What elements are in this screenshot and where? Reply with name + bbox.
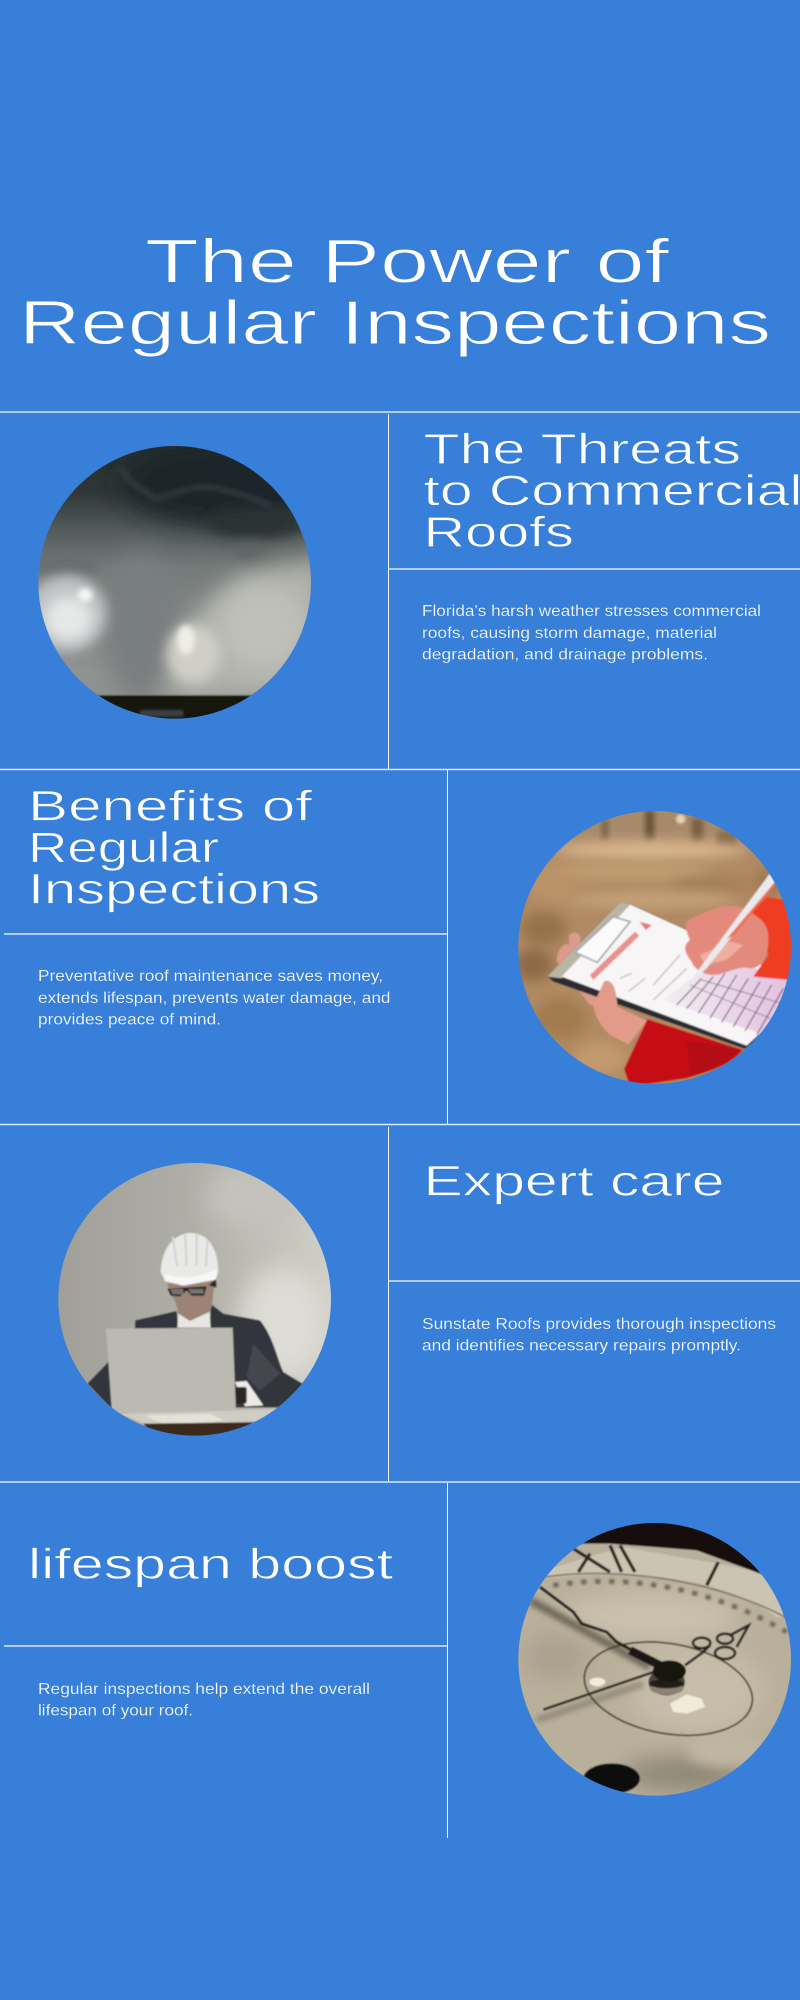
text block: lifespan boost: lifespan of your roof. xyxy=(38,1702,193,1720)
text block: benefits: provides peace of mind. xyxy=(38,1012,221,1028)
heading: expert care: Expert care xyxy=(424,1158,724,1206)
text block: expert care: and identifies necessary repairs promptly. xyxy=(422,1338,741,1354)
text block: lifespan boost xyxy=(38,1681,370,1720)
title: The Power of xyxy=(145,228,670,296)
text block: benefits: extends lifespan, prevents water damage, and xyxy=(38,990,390,1007)
heading: lifespan boost: lifespan boost xyxy=(28,1542,393,1588)
text block: lifespan boost: Regular inspections help extend the overall xyxy=(38,1681,370,1698)
panel: lifespan photo of clock xyxy=(518,1523,791,1796)
title: Regular Inspections xyxy=(19,289,771,358)
heading: the threats: Roofs xyxy=(424,510,574,556)
text block: the threats xyxy=(422,603,761,664)
heading: benefits: Benefits of xyxy=(28,784,312,830)
heading: benefits xyxy=(28,784,320,914)
text block: the threats: degradation, and drainage problems. xyxy=(422,646,708,664)
panel: benefits photo of clipboard xyxy=(518,811,791,1084)
panel: expert care photo of engineer xyxy=(58,1163,331,1436)
heading: the threats xyxy=(424,426,800,556)
text block: benefits xyxy=(38,968,390,1028)
heading: the threats: to Commercial xyxy=(424,468,800,515)
title xyxy=(19,228,771,358)
text block: the threats: Florida's harsh weather stresses commercial xyxy=(422,603,761,620)
text block: benefits: Preventative roof maintenance saves money, xyxy=(38,968,383,985)
text block: expert care xyxy=(422,1316,776,1354)
panel: the threats photo of storm xyxy=(38,446,311,719)
text block: expert care: Sunstate Roofs provides thorough inspections xyxy=(422,1316,776,1333)
heading: benefits: Inspections xyxy=(28,866,320,914)
heading: benefits: Regular xyxy=(28,825,219,872)
heading: the threats: The Threats xyxy=(424,426,741,474)
text block: the threats: roofs, causing storm damage, material xyxy=(422,625,717,642)
